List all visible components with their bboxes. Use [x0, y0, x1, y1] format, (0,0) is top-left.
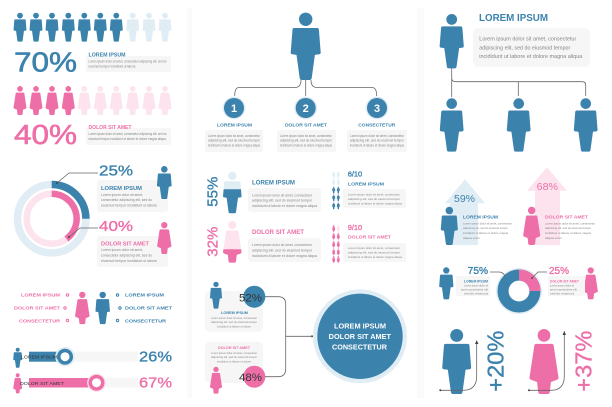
card: 52% male: adipiscing elit, sed do eiusmod tempor	[211, 320, 257, 324]
text block: 59%: adipiscing elit, sed do eiusmod tempor	[463, 226, 508, 230]
card: 52% male: incididunt ut labore et dolore	[217, 324, 251, 328]
column: consectetur	[347, 123, 407, 152]
column: lorem ipsum: incididunt ut labore et dolore magna aliqua	[208, 144, 260, 148]
icon: male donut	[439, 267, 453, 299]
numbered circle 2: 2	[303, 103, 309, 115]
card: 48% female: adipiscing elit, sed do eiusmod tempor	[211, 355, 257, 359]
legend: male labels: CONSECTETUR	[125, 318, 167, 324]
female pictogram row 40%	[14, 86, 171, 115]
progress bar: 26%: LOREM IPSUM	[21, 355, 57, 361]
text block: female share: eiusmod tempor incididunt ut labore	[101, 259, 157, 263]
icon: male arrow	[441, 207, 458, 245]
card: 48% female	[205, 342, 265, 394]
text block: incididunt ut labore et dolore magna aliqua	[479, 54, 583, 60]
card: 48% female: incididunt ut labore et dolore	[217, 360, 251, 364]
heading: LOREM IPSUM	[479, 12, 548, 24]
icon: lower male 3	[574, 98, 598, 152]
stat: 40% donut: 40%	[99, 218, 133, 235]
legend: male labels: LOREM IPSUM	[125, 293, 164, 299]
text block: 32%	[248, 230, 321, 262]
legend: female labels: LOREM IPSUM	[21, 293, 60, 299]
text block: 32%: DOLOR SIT AMET	[252, 230, 304, 236]
text block: 9/10	[343, 223, 406, 262]
legend: male labels	[116, 293, 172, 324]
text block: lorem ipsum: eiusmod tempor incididunt ut labore	[88, 65, 136, 69]
panel: right column	[439, 12, 598, 394]
text block: female share: DOLOR SIT AMET	[101, 241, 149, 247]
column: consectetur: Lorem ipsum dolor sit amet, consectetur	[350, 134, 405, 138]
card: 48% female: 48%	[239, 372, 262, 384]
text block: 6/10: 6/10	[348, 170, 362, 179]
stat: 68%: 68%	[537, 182, 558, 193]
text block: 75%: sed do eiusmod	[464, 292, 489, 296]
icon: male legend	[95, 292, 110, 324]
numbered circle 1	[222, 96, 246, 120]
text block: 25%	[548, 266, 585, 296]
column: lorem ipsum	[205, 123, 263, 152]
icon: female legend	[75, 292, 90, 324]
large circle callout: DOLOR SIT AMET	[329, 334, 392, 341]
numbered circle 3: 3	[374, 103, 380, 115]
icon: female arrow	[523, 207, 540, 245]
numbered circle 2	[294, 96, 317, 120]
text block: 25%: 25%	[549, 266, 569, 277]
text block: 9/10: DOLOR SIT AMET	[348, 234, 391, 240]
card: 48% female: DOLOR SIT AMET	[218, 346, 251, 350]
text block: 55%: Lorem ipsum dolor sit amet, consectetur	[252, 194, 313, 198]
icon: male 55% filled	[223, 172, 242, 213]
text block: 75%	[456, 266, 490, 296]
column: dolor sit amet: adipiscing elit, sed do eiusmod tempor	[280, 139, 333, 143]
text block: 59%: LOREM IPSUM	[463, 215, 498, 220]
icon: female	[157, 222, 171, 254]
text block: 9/10: adipiscing elit, sed do eiusmod tempor	[348, 250, 400, 254]
icon: male	[157, 166, 172, 199]
stat: +20%: +20%	[482, 331, 508, 392]
pictogram grid: 9 of 10	[332, 225, 340, 263]
numbered circle 3	[366, 96, 388, 120]
text block: lorem ipsum	[86, 52, 171, 72]
text block: female share: consectetur adipiscing elit, sed do	[101, 254, 152, 258]
stat: +37%: +37%	[571, 331, 597, 392]
card: 52% male: 52%	[239, 293, 262, 305]
text block: 25%: Lorem ipsum dolor sit	[550, 284, 574, 288]
text block: 32%: adipiscing elit, sed do eiusmod tempor	[252, 248, 313, 252]
text block: dolor sit amet: eiusmod tempor incididunt ut labore et dolore magna aliqua.	[88, 137, 167, 141]
icon: female 32% filled	[223, 221, 242, 263]
card: 52% male: Lorem ipsum dolor sit amet, consectetur	[211, 316, 257, 320]
text block: 59%: aliqua enim	[463, 236, 481, 240]
progress bar: 67%	[13, 373, 172, 393]
text block: dolor sit amet: Lorem ipsum dolor sit amet, consectetur adipiscing elit, sed do	[88, 132, 167, 136]
text block: dolor sit amet	[86, 125, 171, 145]
growth arrow: blue	[439, 340, 478, 391]
org connector	[452, 68, 586, 97]
donut chart: 25% and 40%	[18, 184, 86, 253]
column: dolor sit amet: incididunt ut labore et dolore magna aliqua	[280, 144, 332, 148]
column: consectetur: adipiscing elit, sed do eiusmod tempor	[350, 139, 405, 143]
column: dolor sit amet: DOLOR SIT AMET	[285, 123, 327, 129]
text block: 55%	[248, 181, 321, 212]
text block: 6/10: adipiscing elit, sed do eiusmod tempor	[348, 197, 400, 201]
card: 52% male: LOREM IPSUM	[221, 311, 248, 315]
text block: 68%: DOLOR SIT AMET	[545, 215, 588, 220]
large circle callout	[313, 289, 407, 383]
panel: middle column	[204, 13, 407, 394]
text block: 6/10: Lorem ipsum dolor sit amet, consectetur	[348, 192, 400, 196]
text block: 59%: Lorem ipsum dolor sit amet, consectetur	[463, 221, 512, 225]
column: lorem ipsum: LOREM IPSUM	[217, 123, 252, 129]
text block: 68%: Lorem ipsum dolor sit amet, consectetur	[545, 221, 595, 225]
text block: 32%: incididunt ut labore et dolore magna aliqua	[252, 254, 317, 258]
text block: male share: LOREM IPSUM	[101, 186, 142, 192]
donut chart: 75/25	[496, 268, 542, 314]
leader lines	[56, 173, 98, 238]
card: 52% male	[205, 282, 265, 332]
icon: lower male 2	[507, 98, 531, 152]
text block: male share: eiusmod tempor incididunt ut labore	[101, 204, 157, 208]
background gutters	[187, 8, 424, 398]
arrow: pink up	[527, 167, 567, 245]
text block: dolor sit amet: DOLOR SIT AMET	[88, 125, 132, 131]
legend: male labels: DOLOR SIT AMET	[125, 306, 172, 312]
large circle callout: LOREM IPSUM	[334, 323, 386, 330]
column: dolor sit amet: Lorem ipsum dolor sit amet, consectetur	[280, 134, 333, 138]
icon: large male	[291, 13, 321, 80]
large circle callout: CONSECTETUR	[332, 344, 387, 351]
text block: 9/10: 9/10	[348, 223, 362, 232]
text block: male share: Lorem ipsum dolor sit amet,	[101, 193, 143, 197]
growth arrow: pink	[528, 331, 566, 391]
text block: 75%: LOREM IPSUM	[464, 279, 488, 283]
text block: 75%: 75%	[468, 266, 488, 277]
icon: female donut	[584, 267, 598, 299]
text block: Lorem ipsum dolor sit amet, consectetur	[479, 37, 577, 43]
text block: 6/10: incididunt ut labore et dolore magna aliqua	[348, 202, 402, 206]
text block	[473, 28, 590, 67]
text block: 68%: incididunt ut labore et dolore magna	[545, 231, 591, 235]
text block: 59%: incididunt ut labore et dolore magna	[463, 231, 508, 235]
column: consectetur: incididunt ut labore et dolore magna aliqua	[350, 144, 404, 148]
text block: male share: consectetur adipiscing elit, sed do	[101, 198, 152, 202]
legend: female labels	[14, 293, 69, 324]
stat: 59%: 59%	[454, 194, 475, 205]
pictogram grid: 6 of 10	[332, 172, 340, 209]
text block: adipiscing elit, sed do eiusmod tempor	[479, 45, 571, 51]
text block: 9/10: incididunt ut labore et dolore magna aliqua	[348, 255, 402, 259]
card: 48% female: Lorem ipsum dolor sit amet, consectetur	[211, 351, 257, 355]
icon: male growth	[442, 329, 471, 394]
donut leader lines	[490, 272, 547, 279]
text block: male share	[97, 180, 168, 212]
male pictogram row 70%	[14, 13, 171, 42]
text block: 55%: adipiscing elit, sed do eiusmod tempor	[252, 199, 313, 203]
stat: 40%: 40%	[14, 119, 77, 150]
text block: 68%	[545, 215, 595, 240]
text block: 59%	[463, 215, 512, 240]
text block: 75%: Lorem ipsum dolor sit	[464, 284, 488, 288]
progress bar: 67%: DOLOR SIT AMET	[20, 381, 64, 387]
text block: 55%: LOREM IPSUM	[252, 181, 295, 187]
text block: 32%: Lorem ipsum dolor sit amet, consectetur	[252, 243, 313, 247]
panel: left column	[13, 13, 172, 393]
column: lorem ipsum: Lorem ipsum dolor sit amet, consectetur	[208, 134, 261, 138]
text block: female share	[97, 236, 168, 267]
progress bar: 67%: 67%	[139, 375, 172, 392]
text block: 6/10: LOREM IPSUM	[348, 181, 384, 187]
text block: lorem ipsum: Lorem ipsum dolor sit amet, consectetur adipiscing elit, sed do	[88, 60, 167, 64]
icon: female growth	[529, 329, 559, 394]
arrow: blue up	[445, 179, 485, 245]
progress bar: 26%: 26%	[139, 349, 172, 366]
stat: 25%: 25%	[99, 162, 133, 179]
bracket connector with arrow	[265, 297, 314, 377]
connector lines	[235, 80, 377, 96]
column: dolor sit amet	[277, 123, 336, 152]
text block: female share: Lorem ipsum dolor sit amet,	[101, 248, 143, 252]
stat: 55% rotated: 55%	[204, 177, 221, 207]
text block: 75%: amet consectetur elit	[461, 288, 488, 292]
text block: 68%: aliqua enim	[545, 236, 563, 240]
icon: lower male 1	[440, 98, 464, 152]
column: consectetur: CONSECTETUR	[358, 123, 396, 129]
legend: female labels: CONSECTETUR	[19, 318, 61, 324]
text block: lorem ipsum: LOREM IPSUM	[88, 52, 126, 58]
stat: 70%: 70%	[14, 47, 77, 78]
text block: 68%: adipiscing elit, sed do eiusmod tempor	[545, 226, 591, 230]
text block: 6/10	[343, 170, 406, 208]
text block: 55%: incididunt ut labore et dolore magna aliqua	[252, 204, 317, 208]
text block: 25%: sed do eiusmod	[550, 292, 575, 296]
text block: 25%: amet consectetur elit	[550, 288, 577, 292]
numbered circle 1: 1	[231, 103, 237, 115]
legend: female labels: DOLOR SIT AMET	[14, 306, 60, 312]
icon: top male	[440, 14, 464, 68]
progress bar: 26%	[13, 347, 172, 368]
column: lorem ipsum: adipiscing elit, sed do eiusmod tempor	[208, 139, 261, 143]
text block: 25%: DOLOR SIT AMET	[550, 279, 580, 283]
text block: 9/10: Lorem ipsum dolor sit amet, consectetur	[348, 246, 400, 250]
stat: 32% rotated: 32%	[204, 227, 221, 257]
